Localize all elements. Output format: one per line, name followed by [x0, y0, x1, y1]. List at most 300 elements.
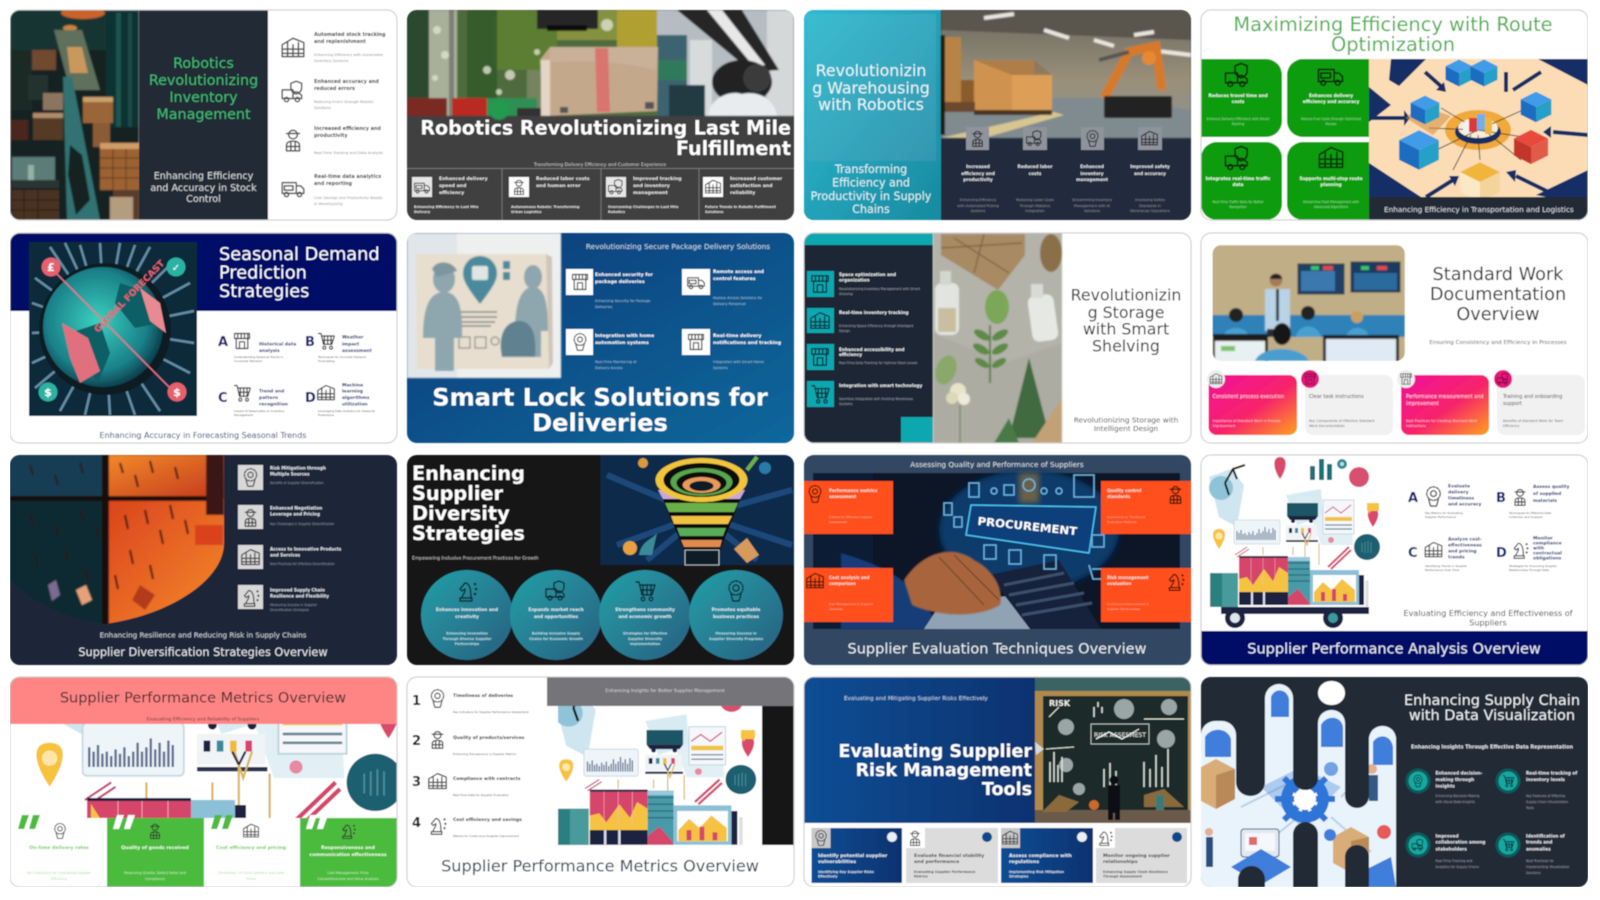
benefit columns: reliability [730, 190, 755, 196]
icons and columns: and accuracy [1134, 171, 1166, 177]
four teal benefit ovals: Strategies for Effective [623, 632, 668, 636]
benefits list: productivity [314, 133, 348, 139]
numbered list: Key Indicators for Supplier Performance Assessment [453, 710, 530, 714]
lettered list: trends [1448, 554, 1465, 560]
title panel: Robotics [173, 56, 234, 72]
subtitle: Empowering Inclusive Procurement Practices for Growth [412, 556, 539, 562]
insights grid: Key Features of Effective [1526, 794, 1566, 798]
green benefit tiles: costs [1232, 99, 1245, 105]
benefits list: Solutions [314, 106, 331, 110]
lettered list: Impact of Seasonality on Inventory [234, 409, 285, 413]
benefits list: reduced errors [314, 86, 355, 92]
benefit columns: Improved tracking [633, 176, 682, 182]
lettered list: Assess quality [1533, 484, 1570, 490]
lettered list: impact [342, 342, 360, 348]
title: Tools [982, 780, 1032, 800]
icons and columns: Streamlining Inventory [1072, 198, 1112, 202]
four tool cards: Identifying Key Supplier Risks [818, 870, 874, 874]
green benefit tiles: Advanced Algorithms [1314, 205, 1348, 209]
photo: control room training [1212, 245, 1405, 365]
four metric columns: Quality of goods received [121, 845, 189, 851]
lettered list: A [1408, 491, 1418, 506]
insights grid: Enhancing Decision-Making [1436, 794, 1479, 798]
lettered list: Historical data [259, 342, 296, 348]
title: Shelving [1092, 336, 1160, 356]
lettered list: Relationships Through Data [1509, 568, 1549, 572]
title panel: and Accuracy in Stock [150, 183, 257, 194]
orange metric boxes: Performance metrics [829, 488, 878, 493]
four teal benefit ovals: Enhances innovation and [436, 607, 498, 613]
image: figures with package pin [407, 233, 561, 378]
icons and columns: Reducing Labor Costs [1016, 198, 1054, 202]
subtitle: Intelligent Design [1094, 424, 1158, 433]
benefits list: Automated stock tracking [314, 32, 386, 38]
insights grid: collaboration among [1436, 840, 1485, 846]
photo: procurement dashboard on laptop [813, 470, 1180, 629]
numbered list: 1 [412, 694, 421, 709]
four metric columns: Cost efficiency and pricing [216, 845, 286, 851]
green benefit tiles: efficiency and accuracy [1303, 99, 1359, 105]
four teal benefit ovals: creativity [455, 614, 479, 620]
caption bar: Enhancing Efficiency in Transportation and Logistics [1384, 205, 1574, 214]
dark feature panel: Integration with smart technology [839, 383, 922, 389]
benefit columns: Solutions [705, 210, 723, 214]
title: Standard Work [1433, 265, 1564, 285]
four tool cards: Monitor ongoing supplier [1103, 853, 1171, 859]
image: globe forecast: GLOBAL FORECAST [93, 258, 168, 335]
lettered list: of supplied [1533, 491, 1561, 497]
teal title panel: Efficiency and [832, 176, 910, 190]
benefits list: Enhancing Efficiency with Automated [314, 53, 383, 57]
benefits list: Benefits of Supplier Diversification [270, 481, 324, 485]
green benefit tiles: Enhance Delivery Efficiency with Smart [1207, 117, 1270, 121]
four teal benefit ovals: Supplier Diversity Programs [709, 637, 763, 641]
slide 7: Revolutionizing Storage with Smart Shelving [804, 233, 1191, 443]
orange metric boxes [804, 481, 1191, 622]
dark feature panel [804, 233, 933, 443]
insights grid: Enhanced decision- [1436, 770, 1483, 776]
four teal benefit ovals: Expands market reach [528, 607, 584, 613]
header text: Assessing Quality and Performance of Suppliers [910, 460, 1084, 469]
orange metric boxes: standards [1107, 494, 1131, 499]
icons and columns: inventory [1080, 171, 1104, 177]
numbered list: 3 [412, 775, 421, 790]
benefits list: and reporting [314, 181, 352, 187]
four teal benefit ovals: Implementation [630, 642, 661, 646]
image: risk chalkboard [1035, 677, 1191, 823]
icons and columns: Solutions [1084, 209, 1100, 213]
title: g Storage [1088, 303, 1164, 322]
four tool cards: relationships [1103, 859, 1138, 865]
numbered list: Compliance with contracts [453, 776, 521, 782]
lettered list: and pricing [1448, 548, 1477, 554]
illustration: logistics truck dashboard [1209, 457, 1380, 628]
benefits list: Measuring Success in Supplier [270, 603, 318, 607]
four teal benefit ovals: Partnerships [455, 642, 479, 646]
orange metric boxes: Selection [829, 607, 843, 611]
four tool cards: Identify potential supplier [818, 853, 888, 859]
four process cards: Consistent process execution [1212, 394, 1284, 400]
title panel: Control [186, 194, 221, 205]
image: globe forecast: £ [47, 261, 55, 274]
icons and columns: Warehouse Operations [1130, 209, 1170, 213]
benefit columns [407, 168, 794, 220]
four tool cards: Assess compliance with [1009, 853, 1072, 859]
slide 4: Maximizing Efficiency with Route Optimization [1201, 10, 1588, 220]
lettered list [1408, 484, 1570, 572]
benefits list: Reducing Errors through Robotic [314, 100, 374, 104]
green benefit tiles: Routes [1326, 122, 1337, 126]
four teal benefit ovals: Chains for Economic Growth [529, 637, 584, 641]
orange metric boxes: Criteria for Effective Supplier [829, 515, 873, 519]
lettered list: analysis [259, 348, 280, 354]
feature list: Deliveries [595, 305, 613, 309]
benefits list: in Warehousing [314, 202, 342, 206]
title: with Smart [1083, 320, 1169, 338]
benefits list: Enhanced Negotiation [270, 506, 322, 510]
slide 13: Supplier Performance Metrics Overview with green tiles [10, 584, 404, 887]
icons and columns: costs [1029, 171, 1042, 177]
four process cards: Improvement [1212, 424, 1236, 428]
insights grid: Real-time tracking of [1526, 770, 1577, 776]
green benefit tiles: Navigation [1229, 205, 1247, 209]
four metric columns: Efficiency [51, 877, 67, 881]
lettered list: Supplier Performance [1425, 515, 1456, 519]
teal title panel: with Robotics [818, 95, 924, 114]
numbered list [412, 690, 530, 838]
title: Seasonal Demand [219, 245, 380, 265]
teal title panel: Chains [852, 203, 890, 216]
benefits list: and replenishment [314, 39, 367, 45]
title: Overview [1456, 305, 1540, 325]
title: Evaluating Supplier [838, 742, 1032, 762]
lettered list: utilization [342, 402, 368, 408]
header text: Revolutionizing Secure Package Delivery Solutions [586, 242, 770, 251]
benefit columns: Delivery [414, 210, 431, 214]
title panel [139, 10, 268, 220]
header band: Enhancing Insights for Better Supplier Management [605, 688, 725, 694]
four tool cards: Evaluate financial stability [914, 853, 984, 859]
insights grid: Real-Time Tracking and [1436, 859, 1472, 863]
title bar: Supplier Performance Analysis Overview [1247, 642, 1541, 658]
four metric columns: Cost Management: Price [327, 871, 369, 875]
lettered list: and accuracy [1448, 502, 1482, 508]
slide 8: Standard Work Documentation Overview [1207, 244, 1585, 436]
header banner: Evaluating Efficiency and Reliability of Suppliers [147, 716, 260, 722]
title panel: Management [156, 107, 251, 123]
icons and columns: Integration [1025, 209, 1045, 213]
title panel: Inventory [169, 90, 238, 106]
icons and columns [957, 127, 1170, 213]
lettered list: Consumer Behavior [234, 359, 263, 363]
illustration: cropped dashboard art [554, 678, 756, 871]
green benefit tiles: Streamline Fleet Management with [1303, 200, 1359, 204]
benefit columns: and human error [536, 183, 581, 189]
title: Smart Lock Solutions for [432, 384, 768, 412]
four tool cards: Metrics [914, 874, 928, 878]
illustration: connected supply chain with pill cut-outs [1201, 677, 1396, 887]
benefits list: Real-Time Tracking and Data Analysis [314, 151, 383, 155]
title: Robotics Revolutionizing Last Mile [420, 116, 791, 140]
insights grid: stakeholders [1436, 846, 1467, 852]
four teal benefit ovals: business practices [713, 614, 759, 620]
four metric columns: Responsiveness and [321, 845, 375, 851]
title: Risk Management [856, 761, 1032, 781]
image: risk chalkboard: RISK [1049, 699, 1071, 708]
dark feature panel: Design [839, 329, 850, 333]
icons and columns: Improving Safety [1135, 198, 1165, 202]
green benefit tiles: Integrates real-time traffic [1206, 176, 1271, 182]
benefits list: Inventory Systems [314, 59, 349, 63]
four tool cards: Through Assessment [1103, 874, 1142, 878]
lettered list: obligations [1533, 556, 1562, 562]
title: Documentation [1430, 285, 1566, 305]
caption: Evaluating Efficiency and Effectiveness of [1403, 608, 1573, 618]
feature list: Systems [713, 366, 728, 370]
lettered list: Predictions [318, 413, 334, 417]
feature list: Integration with home [595, 333, 654, 339]
lettered list: Machine [342, 382, 363, 388]
benefits list [282, 32, 386, 206]
subtitle: Transforming Delivery Efficiency and Customer Experience [533, 162, 666, 168]
image: colourful funnel [600, 455, 794, 565]
four process cards: Clear task instructions [1309, 394, 1364, 400]
green benefit tiles: Reduce Fuel Costs through Optimized [1301, 117, 1361, 121]
green benefit tiles: Enhances delivery [1309, 93, 1353, 99]
four tool cards: and performance [914, 859, 959, 865]
orange metric boxes: Quality control [1107, 488, 1142, 493]
orange metric boxes: Scorecards vs. Traditional [1107, 515, 1146, 519]
image: globe forecast: ✓ [172, 263, 180, 274]
image: globe forecast: $ [44, 386, 52, 399]
four metric columns: Key Indicators for Evaluating Supplier [27, 871, 92, 875]
icons and columns: Improved safety [1130, 164, 1170, 170]
icons and columns: Standards in [1139, 204, 1161, 208]
lettered list: Techniques for Effective Data [1508, 511, 1552, 515]
title: Deliveries [532, 409, 668, 437]
numbered list: Cost efficiency and savings [453, 817, 522, 823]
illustration: isometric route network [1369, 59, 1588, 202]
photo: procurement dashboard on laptop: PROCUREMENT [977, 515, 1078, 538]
four process cards: Importance of Standard Work in Process [1212, 419, 1281, 423]
icons and columns: Enhancing Efficiency [960, 198, 996, 202]
four process cards: improvement [1406, 401, 1439, 407]
four metric columns [10, 815, 397, 887]
slide 11: Supplier Evaluation Techniques Overview [804, 455, 1191, 665]
orange metric boxes: Supplier Relationships [1107, 607, 1141, 611]
green benefit tiles: Supports multi-stop route [1299, 176, 1363, 182]
insights grid: Tools [1525, 806, 1534, 810]
benefit columns: efficiency [439, 190, 464, 196]
four metric columns: On-time delivery rates [29, 845, 89, 851]
slide 10: Enhancing Supplier Diversity Strategies [407, 455, 794, 665]
dark feature panel: Real-Time Data Tracking for Optimal Stock Levels [839, 361, 918, 365]
lettered list: Forecasting [318, 359, 335, 363]
benefit columns: satisfaction and [730, 183, 772, 189]
four teal benefit ovals: Strengthens community [615, 607, 675, 613]
feature list: notifications and tracking [713, 340, 781, 346]
slide 12: Supplier Performance Analysis Overview [1201, 455, 1588, 665]
four teal benefit ovals: Building Inclusive Supply [532, 632, 581, 636]
dark feature panel: Space optimization and [839, 272, 896, 278]
teal title panel: Revolutionizin [816, 61, 926, 80]
slide 16: Enhancing Supply Chain with Data Visualization [1201, 677, 1588, 887]
four teal benefit ovals: and economic growth [618, 614, 672, 620]
lettered list: D [1496, 546, 1507, 561]
slide 15: Evaluating Supplier Risk Management Tools [804, 677, 1191, 887]
slide 2: Robotics Revolutionizing Last Mile Fulfillment [407, 10, 794, 220]
icons and columns: Management with AI [1074, 204, 1110, 208]
lettered list: Performance Over Time [1425, 568, 1459, 572]
benefits list: Best Practices for Effective Diversification [270, 562, 335, 566]
benefits list: Access to Innovative Products [270, 546, 342, 552]
benefit columns: Reduced labor costs [536, 176, 590, 182]
benefits list: Cost Savings and Productivity Boosts [314, 196, 382, 200]
teal title panel: g Warehousing [812, 78, 930, 98]
icons and columns: Systems [971, 209, 986, 213]
insights grid: Best Practices for [1526, 859, 1555, 863]
dark feature panel: Real-time inventory tracking [839, 310, 909, 316]
lettered list: Monitor [1533, 536, 1554, 542]
feature list: package deliveries [595, 279, 645, 285]
photo: parcels and plants [931, 233, 1062, 443]
dark feature panel: Shelving [839, 292, 853, 296]
four process cards: Training and onboarding [1502, 394, 1562, 400]
benefit columns: Urban Logistics [511, 210, 542, 214]
dark feature panel: Systems [839, 402, 853, 406]
lettered list: learning [342, 388, 363, 394]
insights grid: making through [1436, 777, 1474, 783]
four metric columns: Timeliness: On-Time Delivery and Lead [217, 871, 284, 875]
four metric columns: Competitiveness and Value Analysis [317, 877, 379, 881]
lettered list: effectiveness [1448, 542, 1482, 548]
image: globe forecast [29, 242, 197, 416]
caption: Suppliers [1469, 618, 1507, 628]
subtitle: Ensuring Consistency and Efficiency in Processes [1429, 340, 1567, 346]
subtitle: Enhancing Insights Through Effective Data Representation [1411, 744, 1573, 750]
icons and columns: Enhanced [1080, 164, 1104, 170]
insights grid: Implementing Visualization [1526, 865, 1569, 869]
numbered list: Quality of products/services [453, 735, 525, 741]
icons and columns: Through Robotics [1019, 204, 1050, 208]
title panel: Enhancing Efficiency [154, 171, 254, 182]
slide 5: Seasonal Demand Prediction Strategies [10, 233, 397, 443]
insights grid: Analytics for Supply Chains [1436, 865, 1479, 869]
four process cards [1207, 370, 1585, 435]
four tool cards: Implementing Risk Mitigation [1009, 870, 1065, 874]
benefits list: Increased efficiency and [314, 126, 381, 132]
subtitle: Revolutionizing Storage with [1074, 416, 1178, 424]
orange metric boxes: Continuous Improvement in [1107, 602, 1149, 606]
feature list: Integration with Smart Home [713, 360, 764, 364]
four process cards: Instructions [1406, 424, 1426, 428]
lettered list: materials [1533, 498, 1557, 504]
green benefit tiles: planning [1320, 182, 1342, 188]
title: Maximizing Efficiency with Route [1233, 13, 1553, 36]
title: Diversity [412, 502, 510, 525]
lettered list: Techniques for Accurate Demand [317, 355, 366, 359]
image: shield-shaped abstract panels [10, 455, 225, 625]
green benefit tiles: Real-Time Traffic Data for Better [1212, 200, 1264, 204]
photo: robot arm with parcel [407, 10, 794, 120]
benefit columns: Enhanced delivery [439, 176, 488, 182]
dark feature panel: Revolutionizing Inventory Management with Smart [839, 287, 921, 291]
icons and columns: management [1076, 177, 1108, 183]
benefit columns: management [633, 190, 668, 196]
numbered list: Timeliness of deliveries [453, 693, 513, 699]
feature list: Keyless Access Solutions for [713, 296, 763, 300]
slide 1: Robotics Revolutionizing Inventory Management [10, 7, 397, 220]
benefits list: Enhanced accuracy and [314, 79, 379, 85]
orange metric boxes: Risk Management in Supplier [829, 602, 874, 606]
lettered list: D [305, 391, 316, 406]
title: Supplier Performance Metrics Overview [441, 856, 759, 876]
title: Fulfillment [676, 137, 791, 160]
benefit columns: Robotics [608, 210, 625, 214]
title: Supplier Evaluation Techniques Overview [848, 642, 1147, 658]
lettered list: Evaluate [1448, 484, 1470, 490]
lettered list: with [1533, 546, 1544, 552]
feature list: Delivery Access [595, 366, 623, 370]
photo: warehouse aisle [10, 7, 140, 220]
lettered list [218, 334, 375, 417]
four metric columns: communication effectiveness [309, 852, 387, 858]
lettered list: contractual [1533, 550, 1562, 556]
title: Strategies [219, 282, 309, 302]
lettered list: Weather [342, 334, 364, 340]
feature list: Enhanced security for [595, 272, 654, 278]
icons and columns: productivity [963, 177, 993, 183]
four teal benefit ovals: Measuring Success in [715, 632, 757, 636]
icons and columns: efficiency and [961, 171, 995, 177]
benefit columns: Enhancing Efficiency in Last Mile [414, 205, 479, 209]
four metric columns: Compliance [145, 877, 165, 881]
dark feature panel: Seamless Integration with Existing Warehouse [839, 397, 913, 401]
header banner [10, 677, 397, 724]
four tool cards: Strategies [1009, 874, 1028, 878]
teal title panel [804, 10, 941, 220]
benefits list: Diversification Strategies [270, 608, 309, 612]
title: Enhancing [412, 462, 525, 485]
numbered list: Real-Time Data for Supplier Evaluation [453, 793, 509, 797]
dark feature panel: Enhanced accessibility and [839, 347, 904, 353]
title: Optimization [1331, 33, 1455, 56]
four tool cards: Enhancing Supply Chain Resilience [1103, 870, 1169, 874]
benefit columns: Overcoming Challenges in Last Mile [608, 205, 679, 209]
orange metric boxes: Risk management [1107, 575, 1149, 580]
orange metric boxes: Assessment [829, 520, 848, 524]
feature list [566, 269, 781, 370]
lettered list: algorithms [342, 395, 370, 401]
lettered list: Key Metrics for Evaluating [1425, 511, 1463, 515]
slide 6: Smart Lock Solutions for Deliveries [407, 233, 794, 443]
lettered list: Analyze cost- [1448, 536, 1482, 542]
four tool cards: Effectively [818, 874, 838, 878]
numbered list: 4 [412, 816, 421, 831]
benefits list [238, 465, 342, 612]
lettered list: B [305, 335, 315, 350]
feature list: Enhancing Security for Package [595, 299, 650, 303]
lettered list: Understanding Seasonal Trends in [234, 355, 283, 359]
four teal benefit ovals [421, 570, 783, 660]
feature list: control features [713, 276, 756, 282]
lettered list: delivery [1448, 490, 1469, 496]
lettered list: recognition [259, 402, 288, 408]
lettered list: C [1408, 546, 1418, 561]
image: risk chalkboard: RISK ASSESMEST [1094, 731, 1146, 739]
green benefit tiles: Routing [1232, 122, 1244, 126]
benefits list: Multiple Sources [270, 472, 310, 476]
